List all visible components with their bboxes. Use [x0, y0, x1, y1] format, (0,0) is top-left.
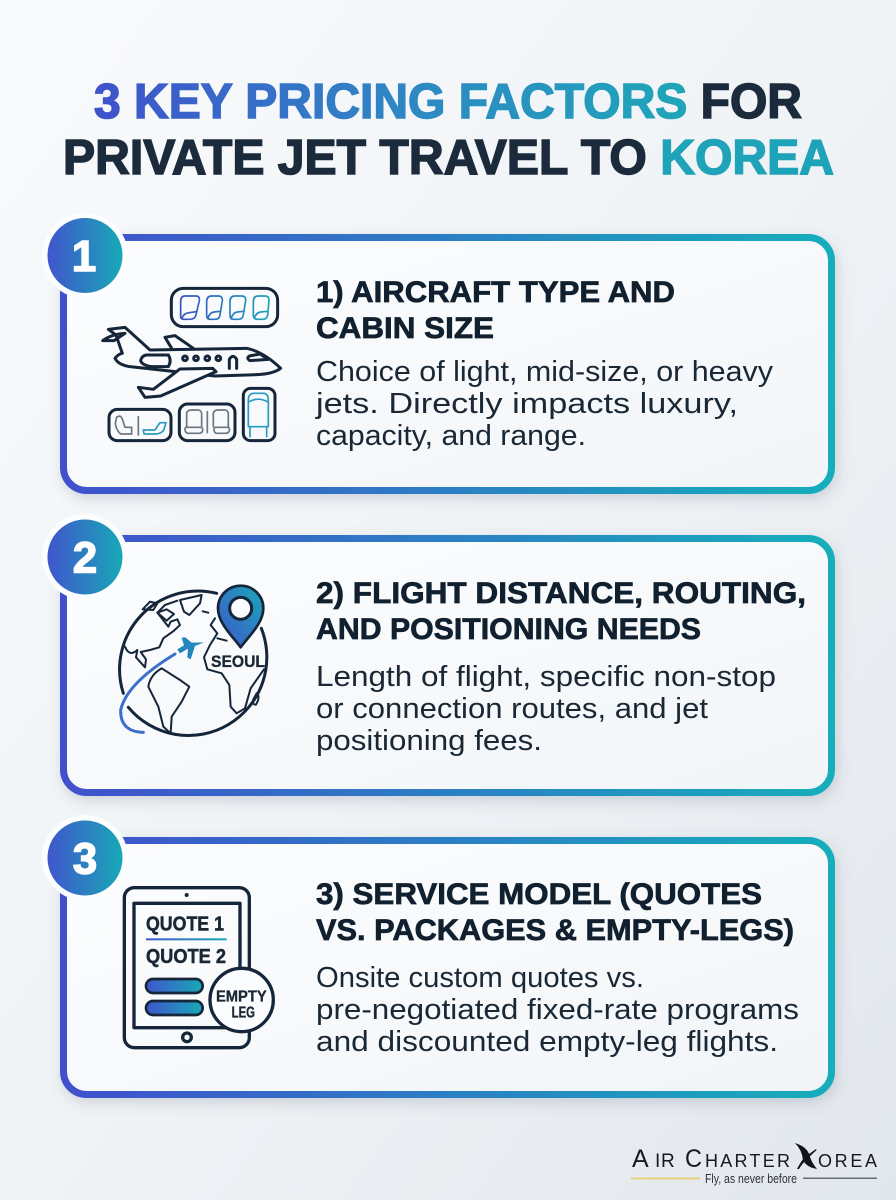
heading 2 — [316, 577, 806, 646]
panel: flight distance, routing and positioning — [42, 514, 832, 792]
body text 3: Onsite custom quotes vs. — [316, 962, 644, 994]
logo: Air Charter Korea: I — [655, 1151, 660, 1172]
body text 1: capacity, and range. — [316, 420, 586, 452]
title: 3 KEY PRICING FACTORS FOR — [94, 75, 802, 129]
heading 3: 3) SERVICE MODEL (QUOTES — [316, 878, 762, 911]
heading 3 — [316, 878, 794, 947]
icon: tablet with quotes and empty leg badge: EMPTY — [216, 989, 267, 1006]
number badge 3: 3 — [73, 834, 97, 884]
heading 3: VS. PACKAGES & EMPTY-LEGS) — [316, 914, 794, 947]
logo: Air Charter Korea: OREA — [818, 1151, 877, 1171]
number badge 3 — [42, 815, 128, 901]
body text 2: Length of flight, specific non-stop — [316, 661, 776, 693]
icon: globe with route and Seoul pin: SEOUL — [211, 652, 265, 671]
body text 2: positioning fees. — [316, 725, 542, 757]
logo: Air Charter Korea: C — [685, 1145, 702, 1173]
icon: tablet with quotes and empty leg badge — [124, 888, 273, 1048]
body text 1: Choice of light, mid-size, or heavy — [316, 356, 774, 388]
logo: Air Charter Korea — [631, 1143, 877, 1186]
icon: tablet with quotes and empty leg badge: QUOTE 1 — [146, 914, 224, 936]
logo: Air Charter Korea: Fly, as never before — [705, 1171, 797, 1186]
heading 2: 2) FLIGHT DISTANCE, ROUTING, — [316, 577, 806, 610]
icon: globe with route and Seoul pin — [120, 586, 267, 735]
number badge 1: 1 — [72, 232, 96, 281]
heading 1: CABIN SIZE — [316, 312, 494, 345]
number badge 2 — [42, 514, 128, 600]
heading 2: AND POSITIONING NEEDS — [316, 613, 701, 646]
title — [63, 75, 834, 185]
body text 2: or connection routes, and jet — [316, 693, 708, 725]
body text 1: jets. Directly impacts luxury, — [315, 388, 738, 420]
icon: jet and cabin seats — [103, 288, 281, 441]
body text 3 — [316, 962, 799, 1058]
number badge 2: 2 — [73, 534, 97, 582]
number badge 1 — [42, 212, 128, 298]
panel: aircraft type and cabin size — [42, 212, 832, 490]
icon: tablet with quotes and empty leg badge: QUOTE 2 — [146, 946, 226, 968]
body text 3: pre-negotiated fixed-rate programs — [316, 994, 799, 1026]
logo: Air Charter Korea: R — [661, 1151, 675, 1172]
logo: Air Charter Korea: A — [632, 1145, 649, 1173]
panel: service model — [42, 815, 832, 1094]
body text 2 — [316, 661, 776, 757]
body text 1 — [315, 356, 774, 452]
icon: tablet with quotes and empty leg badge: LEG — [232, 1005, 255, 1022]
heading 1 — [316, 276, 675, 345]
heading 1: 1) AIRCRAFT TYPE AND — [316, 276, 675, 309]
logo: Air Charter Korea: HARTER — [705, 1151, 790, 1171]
body text 3: and discounted empty-leg flights. — [316, 1026, 778, 1058]
title: PRIVATE JET TRAVEL TO KOREA — [63, 131, 834, 185]
